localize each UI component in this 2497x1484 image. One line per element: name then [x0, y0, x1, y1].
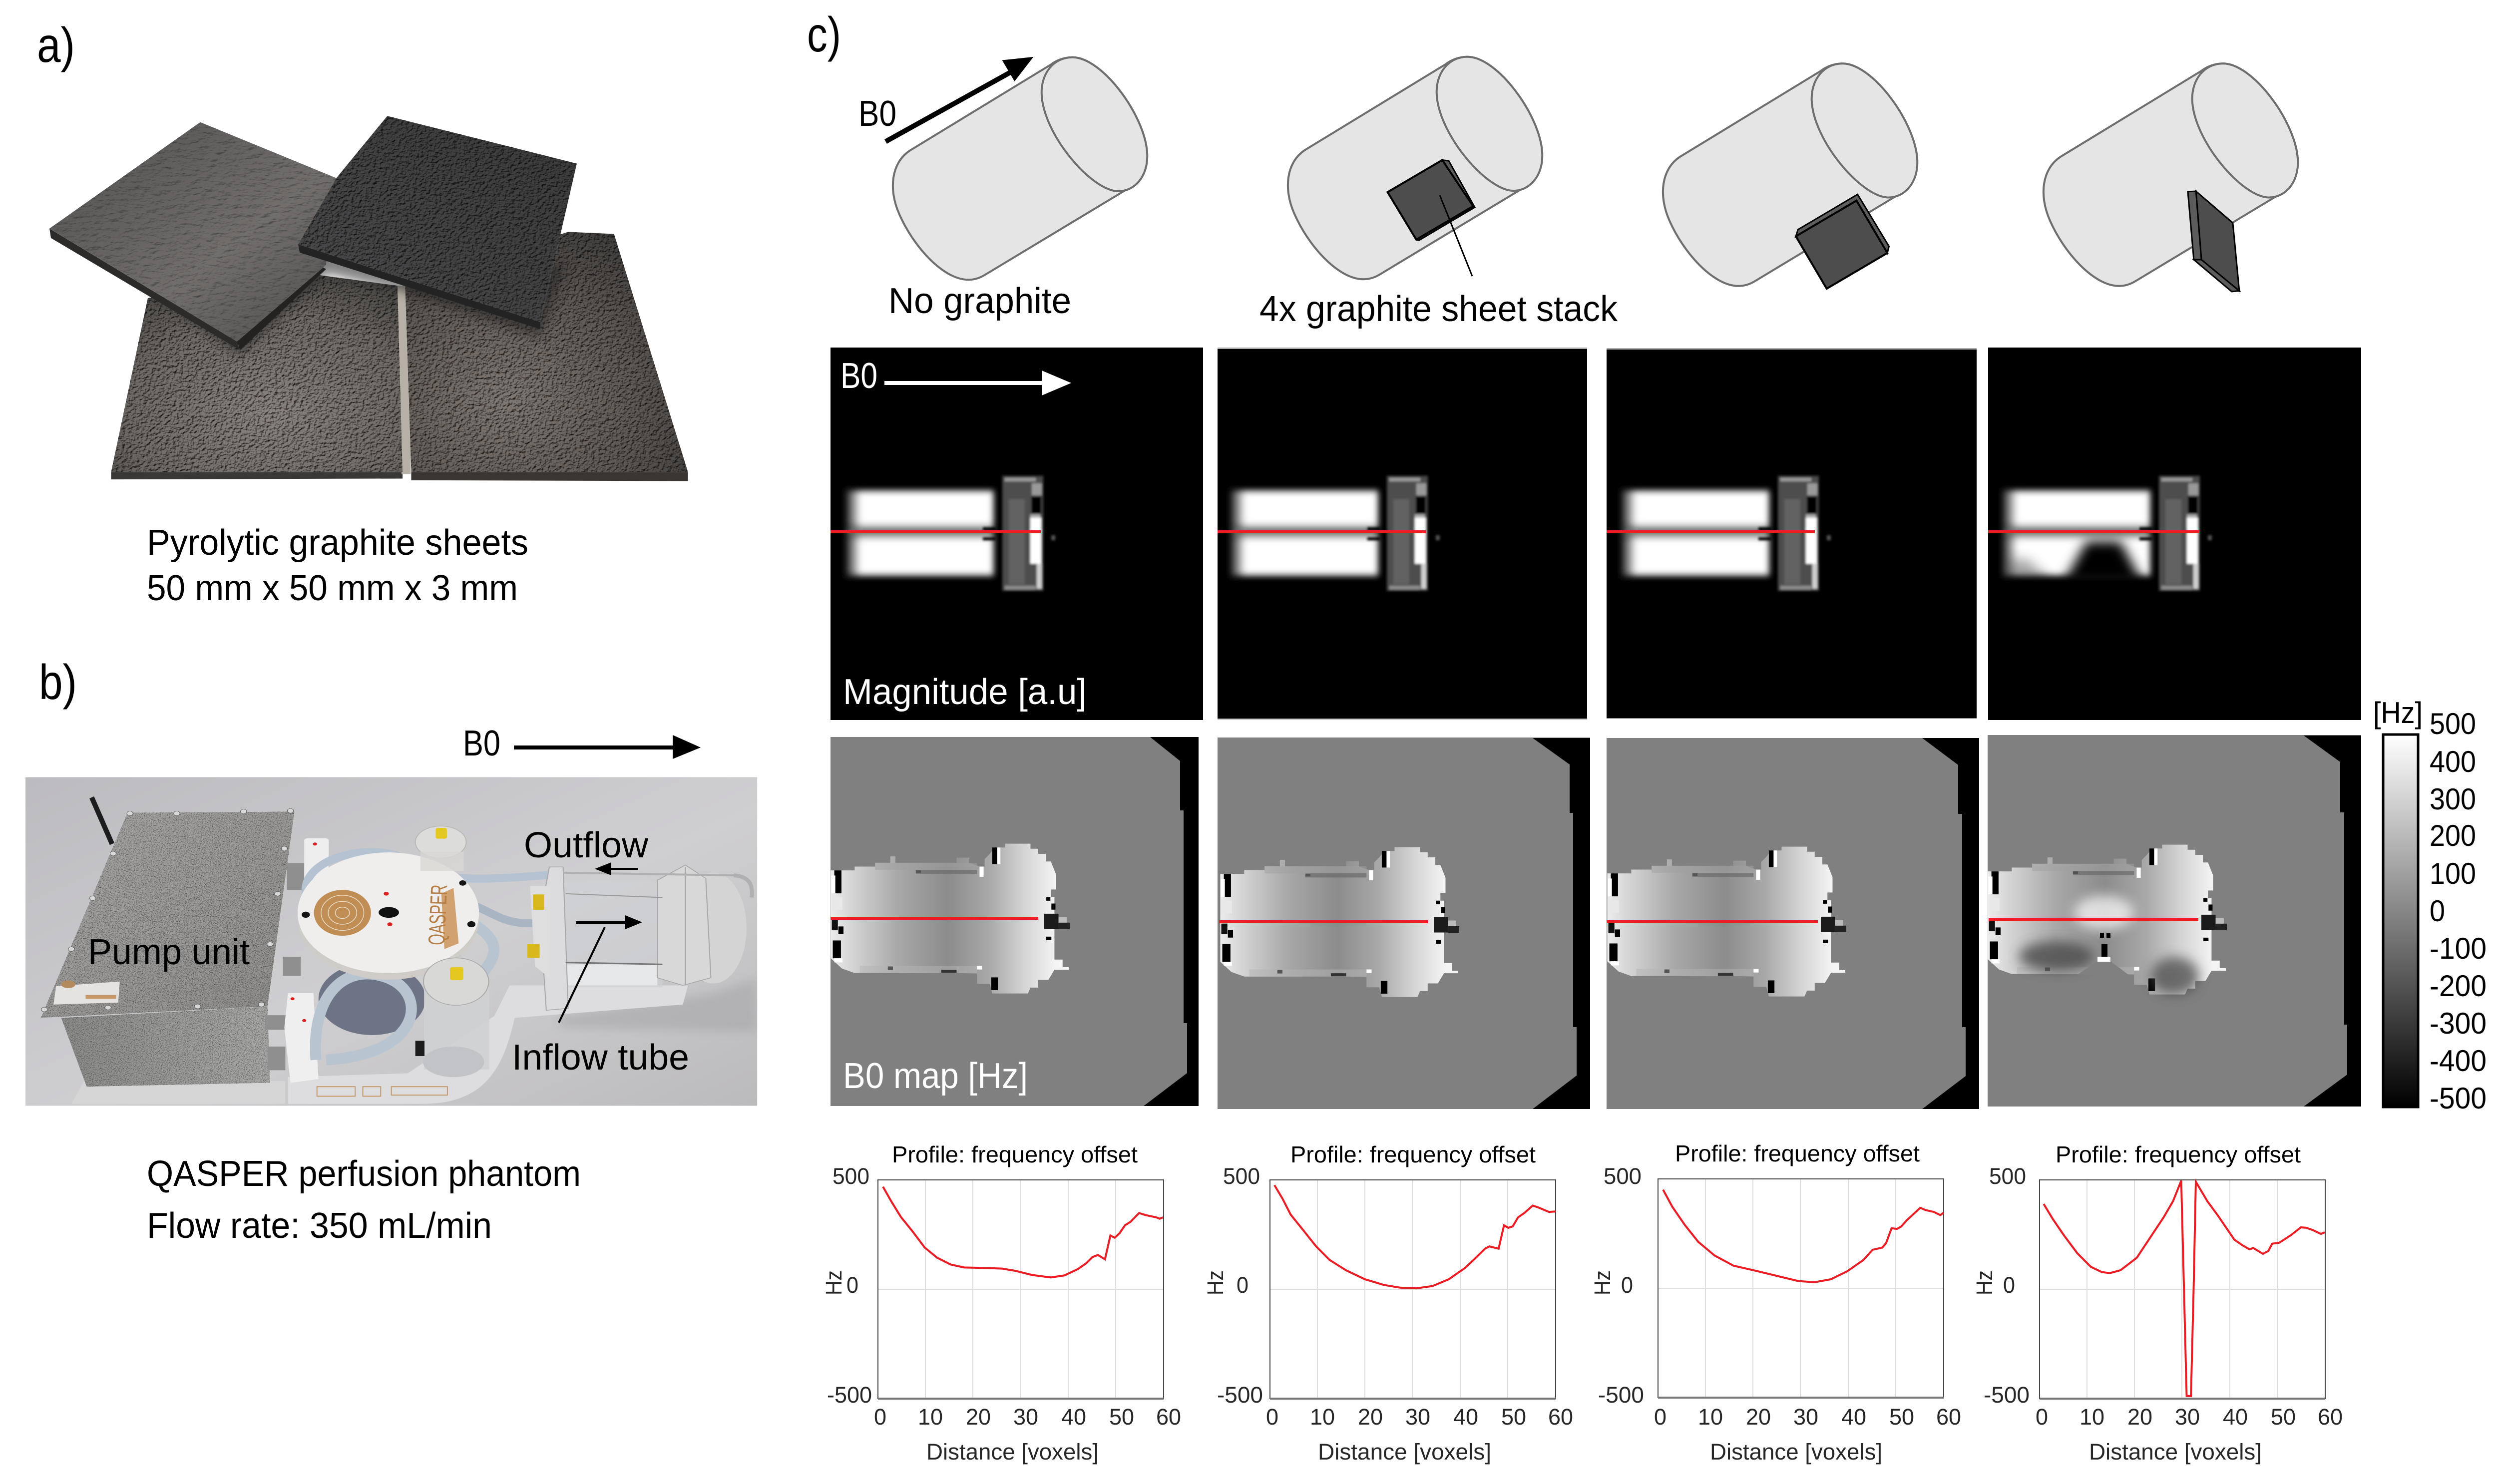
x axis labels: 30 [1013, 1404, 1038, 1430]
y axis labels [1203, 1163, 1263, 1408]
arrow: inflow [576, 915, 642, 929]
x axis labels: Distance [voxels] [926, 1439, 1099, 1465]
caption: QASPER phantom: QASPER perfusion phantom [147, 1154, 581, 1194]
y axis labels [821, 1163, 872, 1408]
chart title: Profile: frequency offset [1675, 1140, 1920, 1166]
x axis labels [2036, 1404, 2343, 1465]
colorbar tick labels: 0 [2430, 894, 2445, 928]
colorbar tick labels [2430, 707, 2487, 1115]
colorbar tick labels: 100 [2430, 857, 2476, 890]
colorbar tick labels: 300 [2430, 782, 2476, 816]
arrow: B0 direction on cylinder [885, 57, 1033, 141]
icon: graphite stack [1796, 194, 1889, 289]
label: magnitude: Magnitude [a.u] [843, 672, 1087, 712]
label: B0 on magnitude: B0 [840, 356, 877, 396]
x axis labels: 0 [2036, 1404, 2048, 1430]
caption: graphite sheets [147, 523, 528, 608]
colorbar tick labels: -500 [2430, 1082, 2487, 1115]
B0 map: stack on top [1218, 738, 1590, 1109]
caption: QASPER phantom: Flow rate: 350 mL/min [147, 1206, 492, 1246]
x axis labels: 10 [2080, 1404, 2104, 1430]
x axis labels: 10 [1698, 1404, 1723, 1430]
icon: graphite stack [1388, 160, 1475, 240]
photo: phantom setup: QASPER [424, 884, 452, 945]
leader line: inflow tube [559, 927, 605, 1023]
x axis labels: 40 [1453, 1404, 1478, 1430]
x axis labels: 40 [1061, 1404, 1086, 1430]
label: pump unit: Pump unit [88, 932, 250, 972]
chart title: Profile: frequency offset [1290, 1141, 1536, 1167]
x axis labels: 50 [1109, 1404, 1134, 1430]
B0 map: perpendicular stack [1988, 735, 2361, 1107]
arrow: B0 white [884, 371, 1071, 395]
x axis labels: 0 [1654, 1404, 1666, 1430]
magnitude image: no graphite [831, 348, 1203, 720]
magnitude image: stack below [1607, 348, 1977, 719]
icon: graphite stack [2188, 191, 2239, 292]
chart title: Profile: frequency offset [892, 1141, 1138, 1167]
leader line: stack [1440, 195, 1472, 276]
y axis labels: 0 [1237, 1272, 1248, 1298]
x axis labels: 0 [1266, 1404, 1278, 1430]
x axis labels: 20 [1746, 1404, 1771, 1430]
x axis labels [874, 1404, 1181, 1465]
y axis labels [1972, 1163, 2030, 1408]
colorbar [2373, 696, 2487, 1115]
x axis labels: Distance [voxels] [1318, 1439, 1491, 1465]
diagram: cylinder with no graphite [858, 57, 1147, 321]
label: B0 map: B0 map [Hz] [843, 1056, 1028, 1096]
y axis labels: -500 [827, 1382, 872, 1408]
y axis labels: -500 [1217, 1382, 1263, 1408]
red profile curve [1274, 1185, 1556, 1288]
y axis labels: 500 [832, 1163, 869, 1189]
colorbar tick labels: -400 [2430, 1044, 2487, 1078]
y axis labels: 500 [1989, 1163, 2026, 1189]
x axis labels [1654, 1404, 1961, 1465]
photo: phantom setup [25, 777, 757, 1106]
colorbar tick labels: 400 [2430, 745, 2476, 778]
x axis labels: 40 [2223, 1404, 2248, 1430]
y axis labels: 500 [1223, 1163, 1260, 1189]
arrow: outflow [595, 862, 638, 875]
x axis labels: 60 [1548, 1404, 1573, 1430]
colorbar tick labels: -300 [2430, 1007, 2487, 1040]
photo: graphite sheets [49, 116, 688, 481]
chart: profile stack below [1590, 1140, 1961, 1465]
y axis labels: 0 [2003, 1272, 2015, 1298]
x axis labels: 20 [1358, 1404, 1383, 1430]
label: inflow tube: Inflow tube [512, 1038, 689, 1078]
x axis labels: 30 [1793, 1404, 1818, 1430]
arrow: B0 direction [514, 735, 701, 759]
panel label a: a) [37, 17, 75, 72]
x axis labels: 60 [2318, 1404, 2343, 1430]
colorbar tick labels: 200 [2430, 819, 2476, 852]
x axis labels: 20 [966, 1404, 991, 1430]
x axis labels: 60 [1936, 1404, 1961, 1430]
x axis labels: 30 [2175, 1404, 2200, 1430]
caption: QASPER phantom [147, 1154, 581, 1246]
colorbar tick labels: -200 [2430, 969, 2487, 1003]
label: outflow: Outflow [524, 825, 649, 865]
panel a: pyrolytic graphite sheets [37, 17, 688, 608]
colorbar tick labels: -100 [2430, 932, 2487, 965]
diagram: cylinder with graphite stack on top [1259, 57, 1618, 329]
panel b: QASPER perfusion phantom [25, 655, 757, 1246]
x axis labels: 0 [874, 1404, 886, 1430]
diagram: cylinder with graphite stack below [1663, 63, 1917, 289]
y axis labels: 500 [1604, 1163, 1642, 1189]
x axis labels: 20 [2127, 1404, 2152, 1430]
y axis labels: Hz [1203, 1270, 1228, 1295]
colorbar tick labels: 500 [2430, 707, 2476, 741]
y axis labels: Hz [1590, 1270, 1615, 1295]
x axis labels: Distance [voxels] [1710, 1439, 1882, 1465]
y axis labels: -500 [1598, 1382, 1644, 1408]
label: graphite sheet stack: 4x graphite sheet stack [1259, 289, 1618, 329]
B0 map: stack below [1607, 738, 1979, 1109]
x axis labels: 60 [1156, 1404, 1181, 1430]
y axis labels: 0 [846, 1272, 858, 1298]
x axis labels: 50 [1889, 1404, 1914, 1430]
x axis labels [1266, 1404, 1573, 1465]
magnitude image: perpendicular stack [1988, 348, 2361, 720]
x axis labels: 50 [2271, 1404, 2296, 1430]
x axis labels: 50 [1501, 1404, 1526, 1430]
panel label b: b) [39, 655, 77, 710]
x axis labels: Distance [voxels] [2089, 1439, 2262, 1465]
diagram: cylinder with perpendicular graphite stack [2044, 63, 2298, 292]
y axis labels: 0 [1621, 1272, 1633, 1298]
x axis labels: 40 [1841, 1404, 1866, 1430]
panel c: graphite configurations and B0 measurements [807, 7, 2487, 1465]
label: B0 on cylinder: B0 [858, 94, 896, 134]
panel label c: c) [807, 7, 841, 62]
chart: profile no graphite [821, 1141, 1181, 1465]
y axis labels [1590, 1163, 1644, 1408]
label: no graphite: No graphite [888, 281, 1071, 321]
colorbar unit: [Hz] [2373, 696, 2423, 730]
magnitude image: stack on top [1218, 348, 1587, 720]
red profile curve [1663, 1190, 1944, 1282]
chart: profile perpendicular stack [1972, 1141, 2343, 1465]
B0 direction label: B0 [463, 724, 500, 763]
red profile curve [883, 1187, 1163, 1277]
y axis labels: -500 [1984, 1382, 2030, 1408]
y axis labels: Hz [1972, 1270, 1997, 1295]
red profile curve [2044, 1180, 2325, 1396]
x axis labels: 30 [1405, 1404, 1430, 1430]
caption: graphite sheets: Pyrolytic graphite sheets [147, 523, 528, 563]
x axis labels: 10 [1310, 1404, 1335, 1430]
caption: graphite sheets: 50 mm x 50 mm x 3 mm [147, 568, 518, 608]
x axis labels: 10 [918, 1404, 943, 1430]
chart title: Profile: frequency offset [2056, 1141, 2301, 1167]
B0 map: no graphite [831, 737, 1199, 1106]
y axis labels: Hz [821, 1270, 846, 1295]
chart: profile stack on top [1203, 1141, 1573, 1465]
